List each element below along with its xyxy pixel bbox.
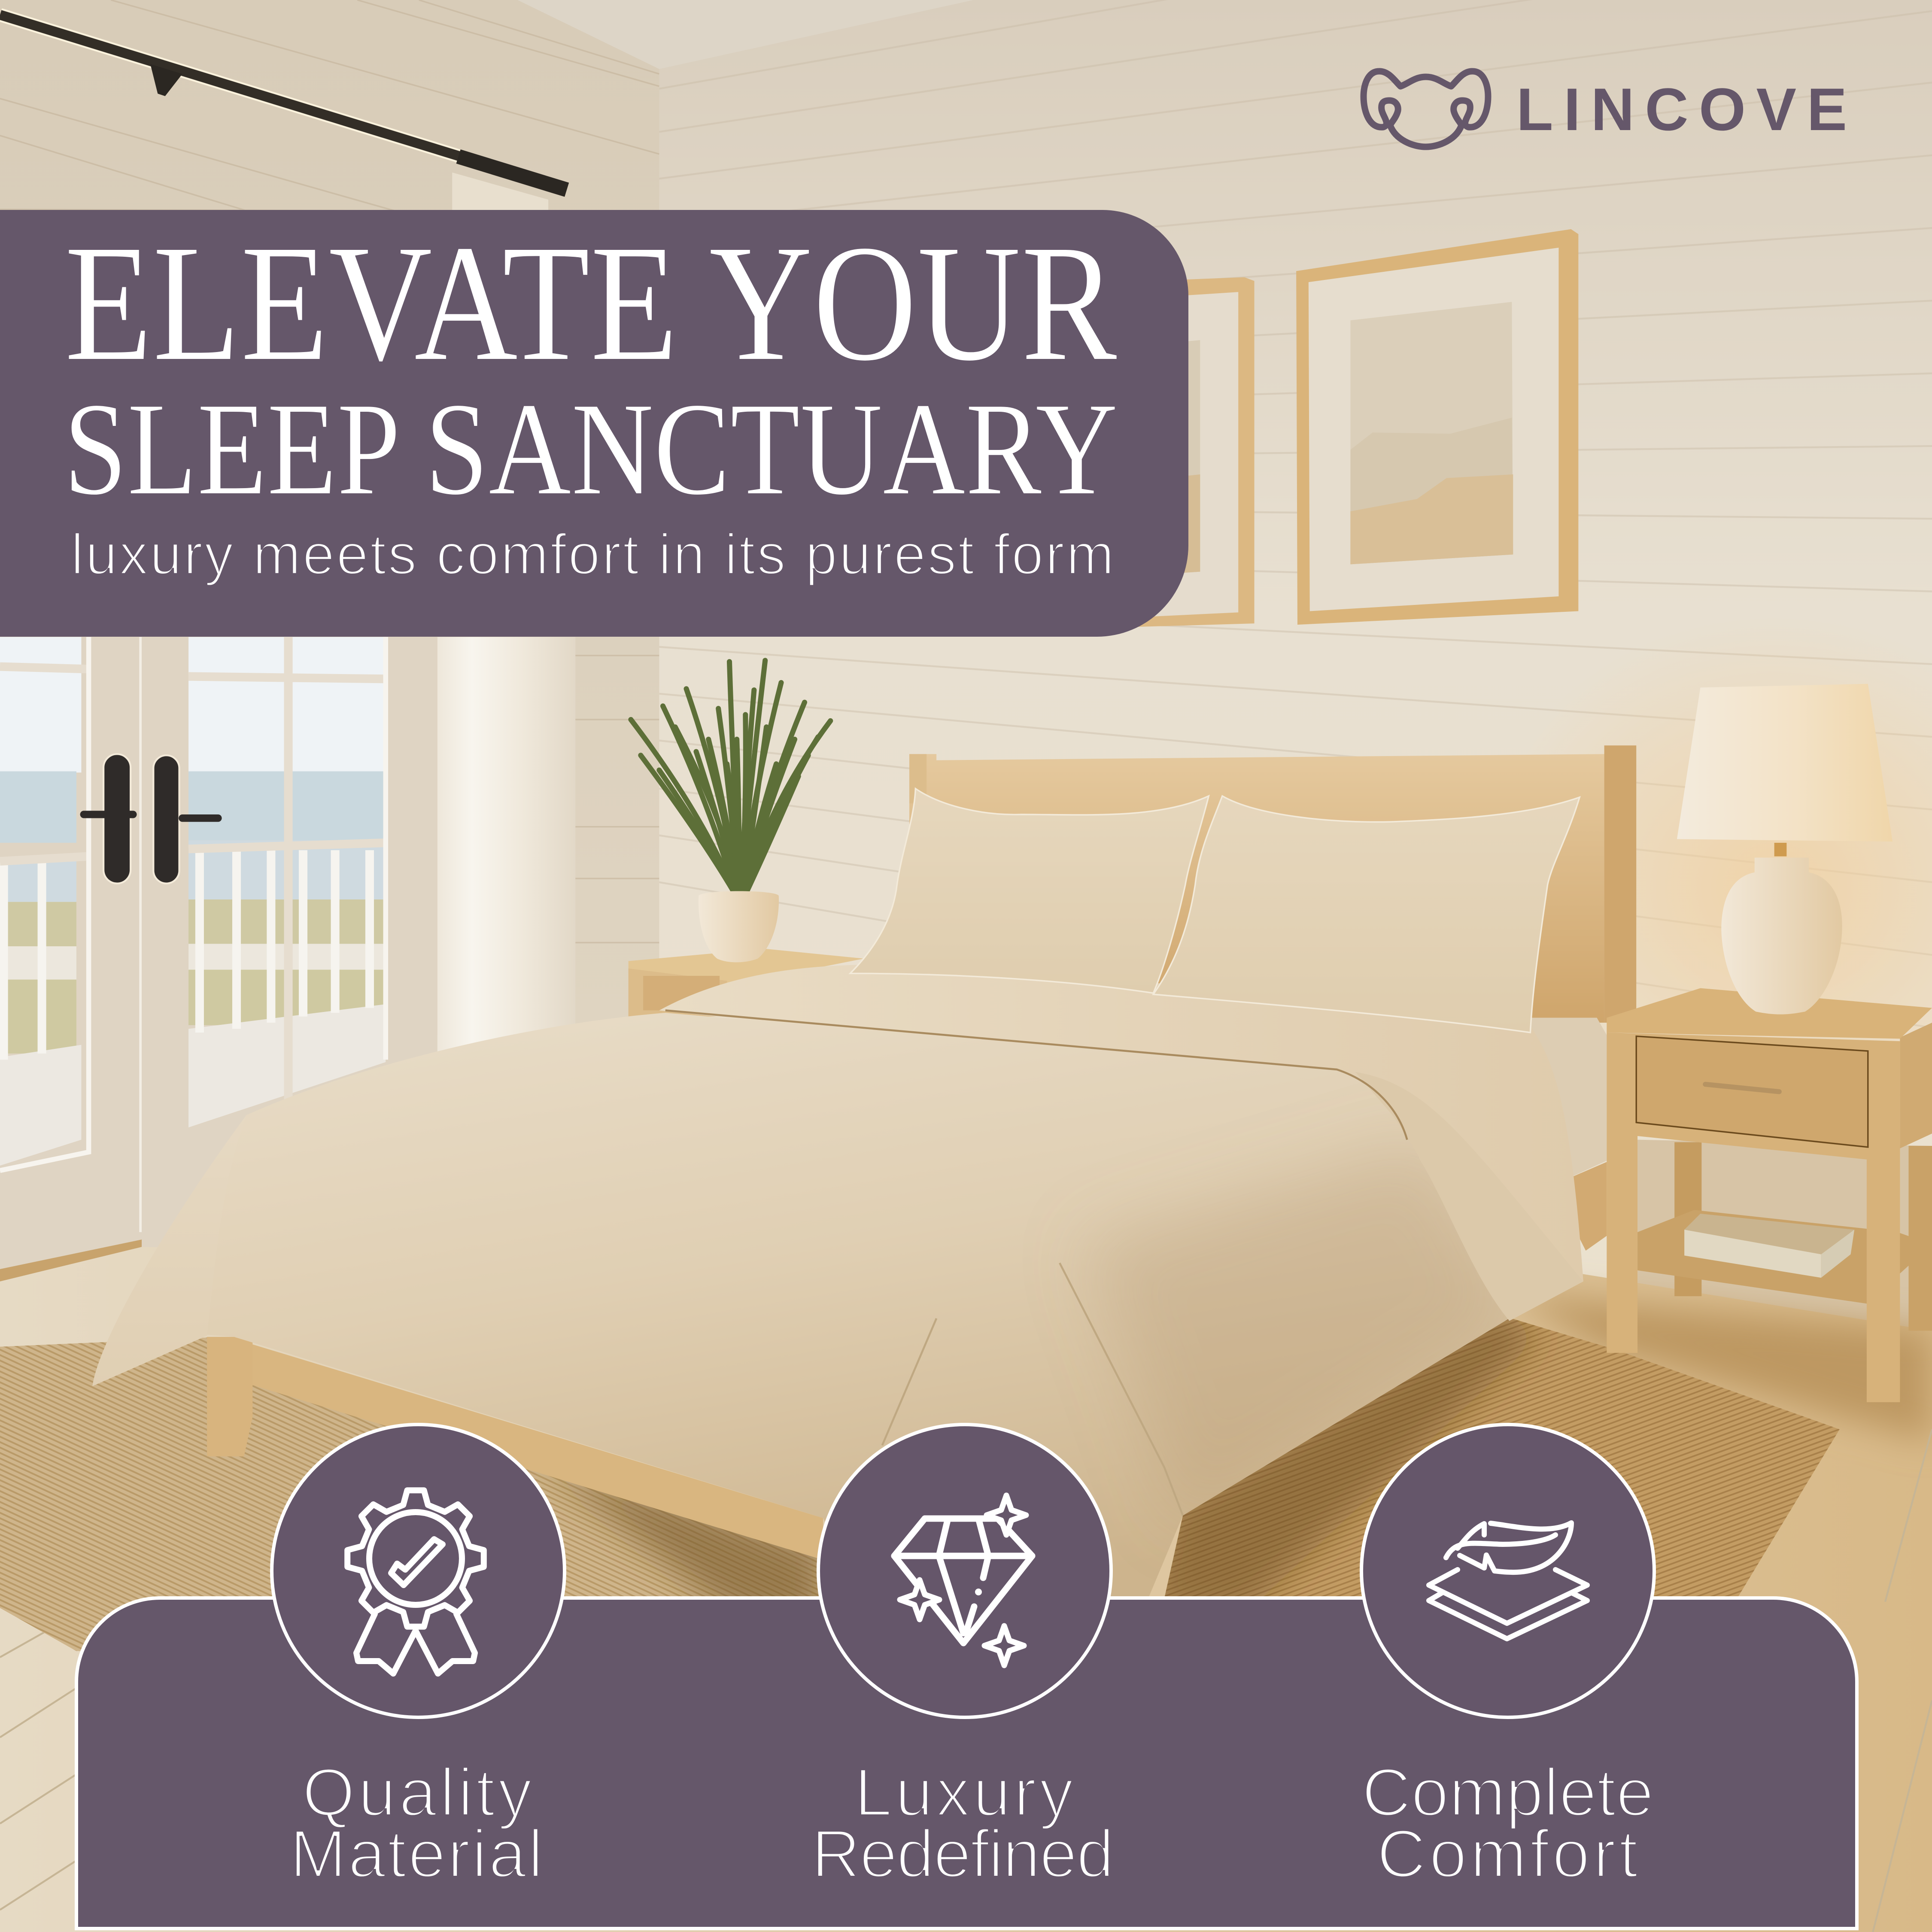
pot <box>699 891 779 962</box>
logo mark <box>1364 71 1488 147</box>
duvet soft shading on right side <box>1096 1145 1499 1485</box>
headline panel <box>0 210 1188 637</box>
picture frame right <box>1296 229 1578 625</box>
floor shadow beneath nightstand <box>1510 1294 1932 1442</box>
title line 1: ELEVATE YOUR <box>64 210 1118 396</box>
shelf <box>1637 1210 1932 1303</box>
benefit: complete comfort <box>1361 1425 1654 1717</box>
curtain rod <box>0 15 567 190</box>
benefit: luxury redefined <box>818 1425 1111 1717</box>
pillow right <box>1153 796 1580 1033</box>
ceiling <box>517 0 973 69</box>
framed landscape art <box>1350 302 1513 564</box>
duvet left drape <box>92 1115 246 1386</box>
curtain top <box>452 173 548 212</box>
duvet side drape <box>1355 1072 1583 1321</box>
rug left <box>0 1337 823 1651</box>
circle badge <box>818 1425 1111 1717</box>
logo wordmark: LINCOVE <box>1516 76 1847 143</box>
floor planks <box>0 1429 1932 1932</box>
left nightstand <box>629 949 864 1017</box>
benefit label: complete comfort <box>1362 1755 1654 1892</box>
label line 1: Luxury <box>854 1755 1073 1830</box>
right door glass: sky and sea <box>188 637 386 1127</box>
panel background <box>76 1598 1857 1929</box>
rug shadow under bed rail <box>548 1476 819 1596</box>
duvet body <box>92 1013 1510 1598</box>
plant <box>631 660 830 962</box>
left wall boards <box>0 0 659 942</box>
drawer handle <box>1705 1084 1779 1092</box>
left wall <box>0 0 659 1035</box>
Lincove logo <box>1364 71 1847 147</box>
right door handle <box>153 755 222 884</box>
wall shade behind nightstand <box>1637 1140 1932 1337</box>
left door handle <box>80 754 137 884</box>
bed frame rail and leg <box>207 1337 823 1560</box>
pillow left <box>850 789 1209 993</box>
back wall <box>0 0 1932 1355</box>
label line 2: Material <box>290 1816 543 1892</box>
circle badge <box>272 1425 565 1717</box>
duvet fold line <box>665 1010 1407 1140</box>
benefit label: luxury redefined <box>811 1755 1114 1892</box>
label line 1: Complete <box>1362 1755 1654 1830</box>
duvet turndown fold <box>659 965 1583 1321</box>
lamp glow on wall <box>1479 616 1932 1158</box>
table lamp <box>1677 684 1893 1015</box>
french doors and windows <box>0 637 437 1290</box>
door sill <box>0 1239 142 1282</box>
benefits panel <box>76 1425 1857 1929</box>
icon: diamond with sparkles <box>894 1495 1032 1665</box>
rug right <box>1164 1312 1840 1598</box>
label line 2: Comfort <box>1377 1816 1638 1892</box>
floor <box>0 1247 1932 1932</box>
left door glass: sky and sea <box>0 637 81 1166</box>
panel background <box>0 210 1188 637</box>
subtitle: luxury meets comfort in its purest form <box>71 522 1114 586</box>
door meeting stile <box>140 637 141 1232</box>
frame band and legs <box>1607 1033 1900 1402</box>
picture frame left <box>1084 277 1255 629</box>
label line 1: Quality <box>302 1755 532 1830</box>
rear legs <box>1674 1142 1701 1296</box>
mullions <box>0 637 386 1121</box>
lamp base <box>1721 857 1842 1015</box>
shiplap boards on back wall <box>659 0 1932 1100</box>
title line 2: SLEEP SANCTUARY <box>64 375 1118 523</box>
benefit label: quality material <box>290 1755 543 1892</box>
bed side rail <box>1552 1162 1607 1251</box>
duvet corner crease <box>882 1263 1183 1516</box>
fitted sheet <box>1417 1018 1607 1185</box>
top surface <box>1607 988 1932 1039</box>
drawer <box>1636 1036 1868 1147</box>
sheer curtain <box>437 637 575 1062</box>
circle badge <box>1361 1425 1654 1717</box>
label line 2: Redefined <box>811 1816 1114 1892</box>
right nightstand <box>1607 988 1932 1402</box>
headboard <box>909 745 1636 1023</box>
fronds <box>631 660 830 897</box>
side panel <box>1900 1023 1932 1148</box>
lamp neck <box>1774 843 1786 857</box>
icon: award rosette <box>347 1490 484 1674</box>
book <box>1684 1214 1854 1278</box>
icon: feather above layered fabric <box>1429 1523 1587 1639</box>
lamp shade <box>1677 684 1893 841</box>
benefit: quality material <box>272 1425 565 1717</box>
rug shadow under duvet <box>1165 1319 1543 1596</box>
